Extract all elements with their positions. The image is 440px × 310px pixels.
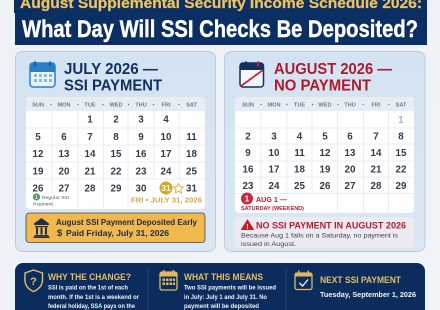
calendar: August 2026: 2 — [245, 132, 251, 142]
calendar: July 2026: 5 — [35, 132, 41, 143]
calendar: July 2026: 2 — [113, 114, 119, 126]
note: Aug 1 Saturday: SATURDAY (WEEKEND) — [241, 206, 304, 212]
section: why the change: SSI is paid on the 1st of each — [48, 284, 128, 292]
calendar: August 2026: 1 — [398, 115, 404, 126]
alert: no SSI payment in August — [235, 217, 414, 248]
icon: checked calendar — [295, 270, 312, 290]
callout: August payment deposited early: August SSI Payment Deposited Early — [56, 218, 198, 227]
calendar: August 2026: 16 — [243, 164, 254, 176]
section: what this means: payment will be deposited — [184, 303, 259, 310]
calendar: August 2026: 14 — [371, 148, 382, 159]
calendar: August 2026: 10 — [269, 148, 280, 159]
calendar: July 2026 — [26, 97, 205, 209]
calendar: July 2026: SAT — [186, 102, 197, 108]
calendar: August 2026: 5 — [322, 132, 328, 142]
calendar: August 2026: 12 — [320, 148, 331, 159]
section: what this means — [160, 270, 276, 310]
icon: bank — [34, 218, 50, 238]
calendar: August 2026: WED — [318, 102, 332, 108]
calendar: August 2026: 15 — [396, 148, 407, 159]
calendar: August 2026: 11 — [294, 148, 305, 159]
icon: shield question: ? — [30, 276, 37, 288]
calendar: July 2026: 20 — [59, 166, 70, 178]
heading: August 2026: AUGUST 2026 — — [274, 61, 392, 78]
legend: regular SSI payment — [33, 194, 70, 208]
calendar: July 2026: TUE — [84, 102, 96, 108]
calendar: July 2026: 7 — [87, 132, 93, 143]
calendar: August 2026: 21 — [371, 164, 382, 176]
calendar: July 2026: 12 — [33, 149, 44, 160]
calendar: August 2026: SUN — [242, 102, 254, 108]
calendar: July 2026: 1 — [87, 114, 93, 126]
legend: regular SSI payment: Payment — [33, 202, 53, 208]
section: next SSI payment — [295, 270, 416, 299]
calendar: August 2026: 25 — [294, 181, 305, 192]
section: why the change: month. If the 1st is a weekend or — [48, 294, 140, 301]
calendar: August 2026: 8 — [398, 132, 404, 142]
calendar: August 2026: 18 — [294, 164, 305, 176]
calendar: July 2026: MON — [57, 102, 71, 108]
legend: regular SSI payment: 1 — [35, 195, 38, 201]
calendar: July 2026: 9 — [138, 132, 144, 143]
calendar: August 2026: 6 — [347, 132, 353, 142]
calendar: July 2026: 14 — [85, 149, 96, 160]
calendar: July 2026: SUN — [32, 102, 44, 108]
calendar: July 2026: 29 — [111, 184, 122, 194]
heading: August 2026: NO PAYMENT — [274, 78, 372, 94]
calendar: August 2026: 29 — [396, 181, 407, 192]
calendar: August 2026: SAT — [396, 102, 407, 108]
icon: gold calendar — [160, 270, 177, 290]
calendar: July 2026: 21 — [85, 166, 96, 178]
alert: no SSI payment in August: Because Aug 1 falls on a Saturday, no payment is — [241, 232, 398, 240]
heading: July 2026: JULY 2026 — — [64, 61, 158, 78]
calendar: August 2026: 24 — [269, 181, 280, 192]
calendar: July 2026: FRI — [161, 102, 171, 108]
calendar: August 2026: 28 — [371, 181, 382, 192]
calendar: July 2026: 6 — [61, 132, 67, 143]
heading: July 2026 — [64, 61, 163, 94]
calendar: July 2026: 4 — [163, 114, 169, 126]
calendar: July 2026: WED — [109, 102, 123, 108]
calendar: July 2026: 23 — [136, 166, 147, 178]
calendar: August 2026: 19 — [320, 164, 331, 176]
calendar: July 2026: 28 — [85, 184, 96, 194]
section: why the change — [25, 270, 140, 310]
panel: August 2026 no payment — [224, 52, 425, 252]
calendar: July 2026: 30 — [136, 184, 147, 194]
icon: crossed calendar — [240, 62, 264, 87]
section: why the change: WHY THE CHANGE? — [48, 272, 131, 282]
section: next SSI payment: Tuesday, September 1, 2026 — [320, 290, 416, 299]
callout: August payment deposited early — [26, 213, 205, 242]
icon: blue calendar — [30, 62, 55, 87]
section: next SSI payment: NEXT SSI PAYMENT — [320, 275, 401, 285]
panel: July 2026 SSI payment — [16, 52, 216, 252]
calendar: July 2026: THU — [135, 102, 147, 108]
section: what this means: in July: July 1 and July 31. No — [184, 294, 267, 301]
icon: warning triangle — [242, 220, 254, 231]
section: why the change: federal holiday, SSA pays on the — [48, 303, 135, 310]
calendar: July 2026: 24 — [161, 166, 172, 178]
calendar: August 2026: 22 — [396, 164, 407, 176]
note: Aug 1 Saturday: 1 — [245, 194, 250, 204]
heading: July 2026: SSI PAYMENT — [64, 78, 163, 94]
alert: no SSI payment in August: NO SSI PAYMENT IN AUGUST 2026 — [256, 220, 406, 230]
calendar: July 2026: 25 — [186, 166, 197, 178]
calendar: July 2026: 19 — [33, 166, 44, 178]
calendar: July 2026: 13 — [59, 149, 70, 160]
alert: no SSI payment in August: issued in August. — [241, 241, 296, 248]
calendar: July 2026: 3 — [138, 114, 144, 126]
date label: Friday July 31: FRI • JULY 31, 2026 — [131, 196, 202, 204]
note: Aug 1 Saturday: AUG 1 — — [256, 195, 287, 204]
calendar: August 2026: TUE — [294, 102, 305, 108]
legend: regular SSI payment: Regular SSI — [42, 195, 70, 201]
calendar: August 2026: 26 — [320, 181, 331, 192]
icon: warning triangle: ! — [246, 224, 249, 231]
calendar: July 2026: 15 — [111, 149, 122, 160]
calendar: August 2026: 9 — [245, 148, 251, 159]
calendar: August 2026: 7 — [373, 132, 379, 142]
calendar: August 2026: THU — [344, 102, 356, 108]
calendar: August 2026: 13 — [345, 148, 356, 159]
calendar: August 2026 — [235, 97, 414, 213]
calendar: August 2026: 23 — [243, 181, 254, 192]
calendar: August 2026: FRI — [371, 102, 381, 108]
panel: bottom information bar — [15, 263, 425, 310]
calendar: August 2026: MON — [267, 102, 281, 108]
calendar: July 2026: 31 — [186, 184, 197, 194]
calendar: July 2026: 22 — [111, 166, 122, 178]
callout: August payment deposited early: $ — [57, 228, 63, 239]
calendar: July 2026: 10 — [161, 132, 172, 143]
calendar: August 2026: 17 — [269, 164, 280, 176]
note: Aug 1 Saturday — [241, 192, 304, 212]
calendar: July 2026: 18 — [186, 149, 197, 160]
heading: August 2026 — [274, 61, 392, 94]
section: what this means: Two SSI payments will be issued — [184, 284, 276, 292]
section: what this means: WHAT THIS MEANS — [184, 272, 263, 282]
calendar: July 2026: 16 — [136, 149, 147, 160]
highlighted date: July 31: 31 — [161, 183, 171, 193]
calendar: July 2026: 27 — [59, 184, 70, 194]
highlighted date: July 31 — [160, 182, 183, 194]
calendar: August 2026: 27 — [345, 181, 356, 192]
calendar: July 2026: 8 — [113, 132, 119, 143]
calendar: July 2026: 17 — [161, 149, 172, 160]
calendar: July 2026: 26 — [33, 184, 44, 194]
calendar: August 2026: 3 — [271, 132, 277, 142]
calendar: August 2026: 4 — [297, 132, 303, 142]
calendar: August 2026: 20 — [345, 164, 356, 176]
title — [14, 0, 427, 45]
calendar: July 2026: 11 — [186, 132, 197, 143]
callout: August payment deposited early: Paid Friday, July 31, 2026 — [66, 229, 169, 238]
